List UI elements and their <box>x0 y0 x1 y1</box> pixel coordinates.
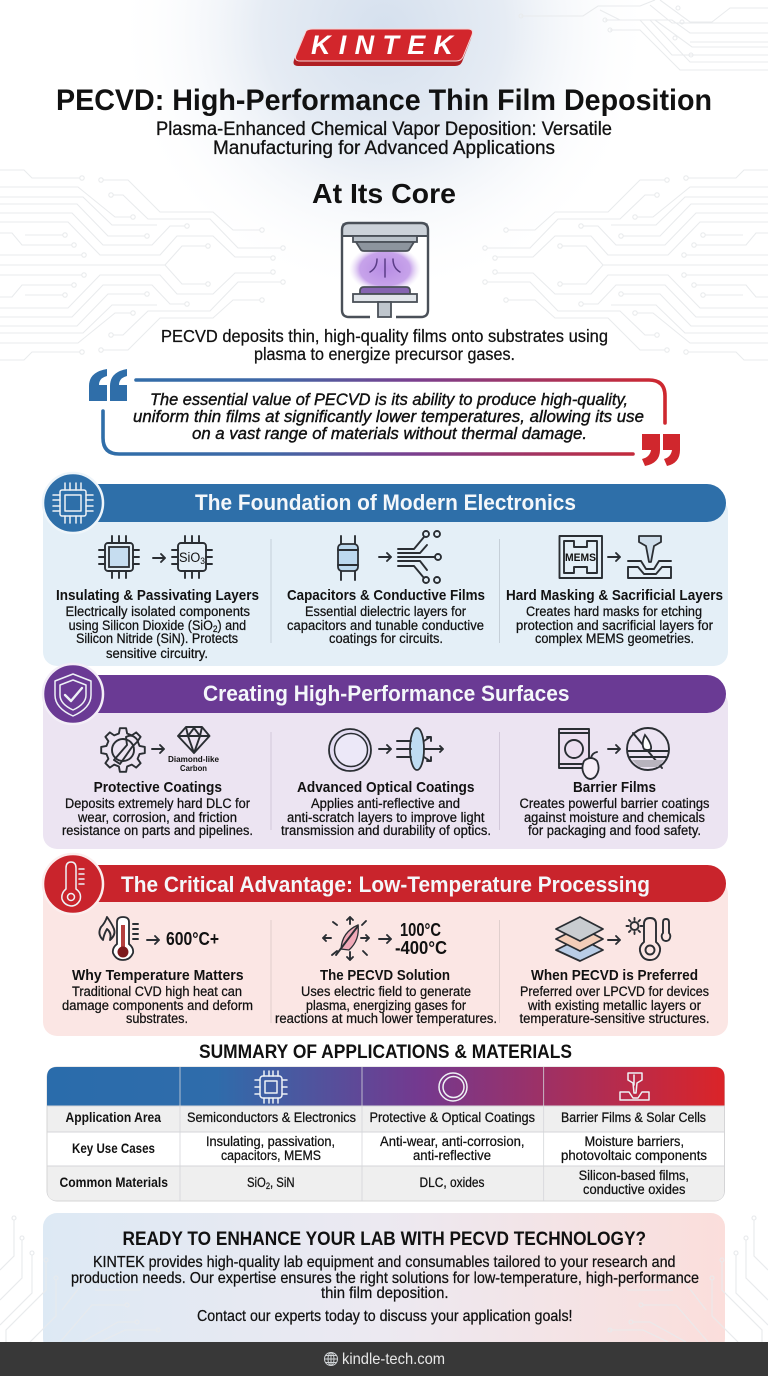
text: insulating and passivating layers <box>56 587 259 661</box>
table background <box>47 1067 724 1201</box>
text: advanced optical coatings: transmission and durability of optics. <box>281 823 491 838</box>
row: key use cases: anti-reflective <box>413 1148 491 1163</box>
quote text: on a vast range of materials without thermal damage. <box>192 424 587 443</box>
text: why temperature matters: Why Temperature Matters <box>72 967 244 984</box>
column dividers <box>271 732 500 830</box>
panel: call to action <box>0 1213 768 1353</box>
column dividers <box>271 539 500 643</box>
row: key use cases: Insulating, passivation, <box>206 1134 335 1149</box>
row: common materials: 2 <box>266 1181 270 1191</box>
text: insulating and passivating layers: 2 <box>213 624 218 634</box>
section header bar: The Critical Advantage: Low-Temperature Processing <box>121 872 650 897</box>
row: common materials: conductive oxides <box>583 1182 686 1197</box>
text: barrier films: Barrier Films <box>573 779 656 796</box>
text: insulating and passivating layers: sensitive circuitry. <box>106 646 208 661</box>
text: protective coatings: wear, corrosion, and friction <box>77 810 237 825</box>
icon badge: shield <box>43 664 103 724</box>
text: when PECVD is preferred: temperature-sensitive structures. <box>520 1011 710 1026</box>
row: common materials: Silicon-based films, <box>579 1168 689 1183</box>
row: application area: Protective & Optical Coatings <box>370 1110 535 1125</box>
icon: gear to diamond-like carbon: Diamond-like <box>168 754 219 764</box>
row: application area: Application Area <box>66 1110 161 1125</box>
text: protective coatings: Deposits extremely hard DLC for <box>65 796 250 811</box>
text: insulating and passivating layers: ) and <box>218 618 246 633</box>
panel: low-temperature processing <box>43 854 728 1036</box>
text: capacitors and conductive films: Capacitors & Conductive Films <box>287 587 485 604</box>
row: common materials: DLC, oxides <box>420 1175 485 1190</box>
text: advanced optical coatings <box>281 779 491 838</box>
closing quote mark <box>642 434 680 466</box>
row: key use cases <box>72 1134 707 1163</box>
text: capacitors and conductive films <box>287 587 485 646</box>
title: PECVD: High-Performance Thin Film Deposition <box>56 84 712 117</box>
quote text: uniform thin films at significantly lower temperatures, allowing its use <box>133 407 644 426</box>
icon: plasma to 100-400°C: -400°C <box>395 938 447 958</box>
row: key use cases: capacitors, MEMS <box>221 1148 321 1163</box>
icon: chip to SiO2: 3 <box>200 556 205 566</box>
row: key use cases: Moisture barriers, <box>584 1134 684 1149</box>
quote text: The essential value of PECVD is its ability to produce high-quality, <box>150 390 628 409</box>
icon: etch header <box>620 1073 649 1100</box>
panel: high-performance surfaces <box>43 664 728 849</box>
icon: capacitor to traces <box>338 531 441 583</box>
icon: globe <box>324 1352 338 1366</box>
text: capacitors and conductive films: capacitors and tunable conductive <box>287 618 484 633</box>
row: key use cases: Anti-wear, anti-corrosion, <box>380 1134 524 1149</box>
text: why temperature matters: substrates. <box>126 1011 188 1026</box>
text: when PECVD is preferred: Preferred over LPCVD for devices <box>520 984 709 999</box>
icon: PECVD chamber <box>342 223 428 317</box>
icon: thermometer to 600°C+: 600°C+ <box>166 929 219 949</box>
subtitle: Manufacturing for Advanced Applications <box>213 137 555 159</box>
icon badge: chip <box>43 473 103 533</box>
text: capacitors and conductive films: coatings for circuits. <box>329 631 443 646</box>
text: insulating and passivating layers: Silicon Nitride (SiN). Protects <box>76 631 238 646</box>
row: key use cases: Key Use Cases <box>72 1141 155 1156</box>
icon badge: thermometer <box>43 854 103 914</box>
cta body: thin film deposition. <box>321 1285 448 1302</box>
icon: plasma to 100-400°C <box>323 917 447 960</box>
text: the PECVD solution: reactions at much lower temperatures. <box>275 1011 497 1026</box>
text: when PECVD is preferred <box>520 967 710 1026</box>
text: advanced optical coatings: Applies anti-reflective and <box>311 796 460 811</box>
logo: KINTEK <box>294 29 472 66</box>
section header bar: The Foundation of Modern Electronics <box>195 490 576 515</box>
icon: thermometer to 600°C+ <box>99 917 219 960</box>
row: common materials: Common Materials <box>60 1175 168 1190</box>
icon: MEMS to etch <box>560 536 671 578</box>
panel: foundation of modern electronics <box>43 473 728 666</box>
row: common materials: SiO <box>247 1175 270 1190</box>
opening quote mark <box>89 369 127 401</box>
text: why temperature matters: damage components and deform <box>62 998 253 1013</box>
intro text <box>161 326 608 364</box>
text: when PECVD is preferred: When PECVD is Preferred <box>531 967 698 984</box>
icon: chip to SiO2: SiO <box>179 550 202 565</box>
text: insulating and passivating layers: using Silicon Dioxide (SiO <box>69 618 224 633</box>
column dividers <box>271 920 500 1023</box>
text: protective coatings: Protective Coatings <box>94 779 222 796</box>
section header bar <box>60 865 726 902</box>
subtitle: Plasma-Enhanced Chemical Vapor Deposition: Versatile <box>156 118 612 140</box>
icon: plasma to 100-400°C: 100°C <box>400 920 441 940</box>
logo: KINTEK: KINTEK <box>311 30 456 60</box>
section header bar: Creating High-Performance Surfaces <box>203 681 570 706</box>
text: advanced optical coatings: anti-scratch layers to improve light <box>287 810 485 825</box>
quote frame <box>103 380 665 454</box>
text: capacitors and conductive films: Essential dielectric layers for <box>305 604 466 619</box>
icon: gear to diamond-like carbon: Carbon <box>180 763 207 773</box>
heading: At Its Core: At Its Core <box>312 178 456 209</box>
text: protective coatings: resistance on parts and pipelines. <box>62 823 253 838</box>
text: when PECVD is preferred: with existing metallic layers or <box>527 998 701 1013</box>
intro text: PECVD deposits thin, high-quality films onto substrates using <box>161 326 608 346</box>
text: the PECVD solution: plasma, energizing gases for <box>306 998 466 1013</box>
row: application area: Semiconductors & Electronics <box>187 1110 356 1125</box>
text: the PECVD solution <box>275 967 497 1026</box>
summary table <box>47 1067 724 1201</box>
text: why temperature matters: Traditional CVD high heat can <box>72 984 242 999</box>
text: advanced optical coatings: Advanced Optical Coatings <box>297 779 474 796</box>
row: common materials: , SiN <box>270 1175 294 1190</box>
text: barrier films <box>520 779 710 838</box>
heading: summary of applications and materials: SUMMARY OF APPLICATIONS & MATERIALS <box>199 1042 572 1063</box>
quote text <box>133 390 644 443</box>
text: hard masking and sacrificial layers <box>506 587 723 646</box>
text: hard masking and sacrificial layers: protection and sacrificial layers for <box>516 618 713 633</box>
row: application area: Barrier Films & Solar Cells <box>561 1110 706 1125</box>
text: insulating and passivating layers: Insulating & Passivating Layers <box>56 587 259 604</box>
intro text: plasma to energize precursor gases. <box>254 344 515 364</box>
icon: layers to thermometers <box>556 917 670 961</box>
text: protective coatings <box>62 779 253 838</box>
cta body <box>71 1254 699 1325</box>
text: insulating and passivating layers: Electrically isolated components <box>66 604 250 619</box>
text: barrier films: Creates powerful barrier coatings <box>520 796 710 811</box>
cta body: Contact our experts today to discuss your application goals! <box>197 1308 572 1325</box>
text: why temperature matters <box>62 967 253 1026</box>
row: common materials <box>60 1168 689 1197</box>
cta body: production needs. Our expertise ensures the right solutions for low-temperature, high-performance <box>71 1270 699 1287</box>
row: key use cases: photovoltaic components <box>561 1148 707 1163</box>
icon: gear to diamond-like carbon <box>101 727 219 773</box>
icon: optical lens <box>329 728 443 771</box>
text: the PECVD solution: Uses electric field to generate <box>301 984 471 999</box>
footer bar <box>0 1342 768 1376</box>
text: the PECVD solution: The PECVD Solution <box>320 967 450 984</box>
row: application area <box>66 1110 706 1125</box>
text: hard masking and sacrificial layers: Creates hard masks for etching <box>526 604 702 619</box>
footer url: kindle-tech.com <box>342 1351 445 1368</box>
cta body: KINTEK provides high-quality lab equipment and consumables tailored to your research and <box>93 1254 676 1271</box>
icon: food packaging to moisture barrier <box>559 728 669 779</box>
icon: MEMS to etch: MEMS <box>565 552 596 564</box>
text: barrier films: for packaging and food safety. <box>528 823 701 838</box>
section header bar <box>60 484 726 522</box>
text: hard masking and sacrificial layers: complex MEMS geometries. <box>535 631 694 646</box>
text: hard masking and sacrificial layers: Hard Masking & Sacrificial Layers <box>506 587 723 604</box>
cta heading: READY TO ENHANCE YOUR LAB WITH PECVD TECHNOLOGY? <box>122 1229 646 1250</box>
callout: essential value quote <box>89 369 680 466</box>
icon: chip to SiO2 <box>99 536 212 578</box>
subtitle <box>156 118 612 159</box>
icon: lens header <box>439 1073 467 1101</box>
text: barrier films: against moisture and chemicals <box>524 810 705 825</box>
section header bar <box>60 675 726 713</box>
icon: chip header <box>255 1071 287 1103</box>
